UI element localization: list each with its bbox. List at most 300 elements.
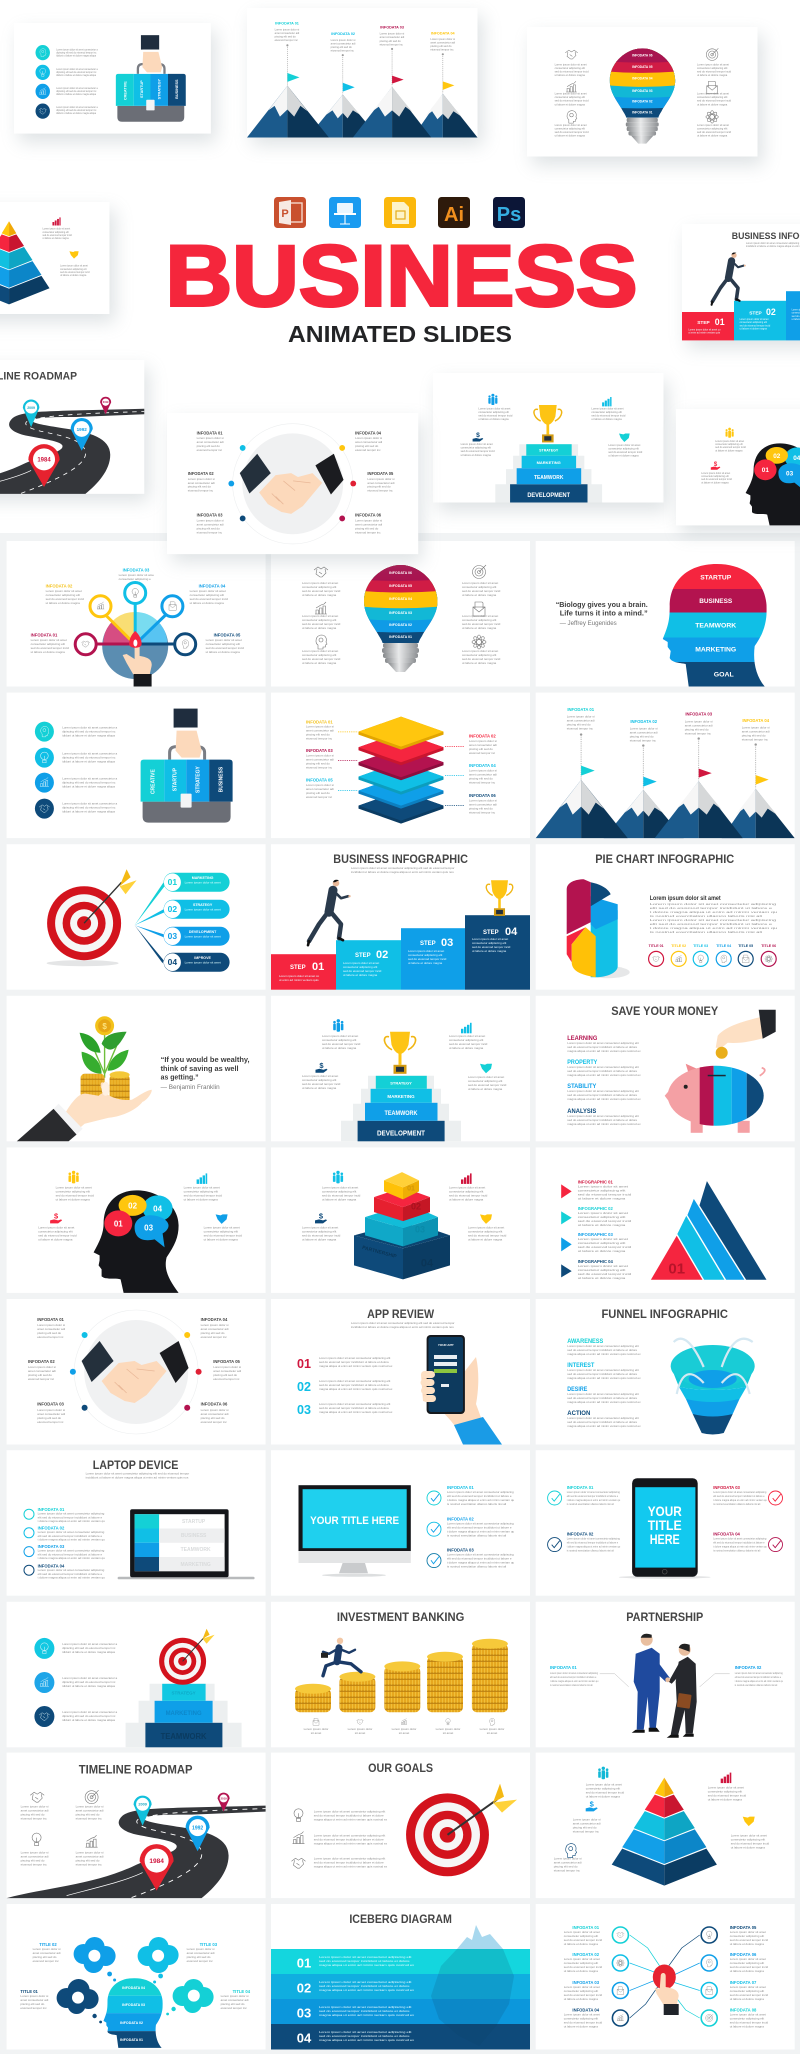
icon: Illustrator: Ai [444, 204, 464, 226]
icon: hand and coin [716, 1010, 776, 1059]
slide: desktop monitor [271, 1450, 530, 1596]
pill labels [189, 876, 217, 960]
step text: Lorem ipsum dolor sit amet co [279, 974, 320, 978]
briefcase body [141, 760, 233, 823]
labels and text: INFODATA 02 [447, 1517, 474, 1522]
tablet title [648, 1503, 682, 1547]
slide: investment banking [271, 1602, 530, 1747]
figure: runner [308, 890, 348, 945]
icon: target [159, 1638, 206, 1685]
labels [567, 707, 770, 724]
labels and text: DESIRE [567, 1386, 587, 1393]
pill numbers: 03 [168, 931, 177, 941]
numbers [297, 1956, 312, 2046]
labels: INFODATA 02 [46, 584, 73, 588]
bottom captions: Lorem ipsum dolor [436, 1727, 460, 1731]
labels and text [550, 1665, 783, 1687]
hero card: handshake [167, 413, 422, 562]
pill labels: DEVELOPMENT [189, 930, 217, 934]
heading: INVESTMENT BANKING [337, 1612, 464, 1624]
figure: runner head [333, 880, 351, 897]
layers illustration [271, 693, 530, 838]
pyramid [612, 1778, 717, 1886]
icon: hand behind phone [421, 1357, 483, 1429]
labels: Lorem ipsum dolor sit ame [119, 573, 154, 577]
subtitle: ANIMATED SLIDES: ANIMATED SLIDES [288, 321, 512, 347]
bottom captions [304, 1727, 504, 1735]
briefcase handle and hand [170, 709, 205, 760]
pin years: 2009 [138, 1803, 147, 1807]
labels: INFODATA 06 [201, 1402, 228, 1406]
vertical labels: STRATEGY [196, 766, 202, 793]
stair labels: DEVELOPMENT [377, 1130, 426, 1137]
step labels [290, 926, 518, 973]
pill numbers: 04 [168, 957, 177, 967]
slide: iceberg diagram [271, 1904, 530, 2050]
labels and text: ACTION [567, 1410, 591, 1417]
bulb band labels: INFODATA 05 [389, 584, 412, 588]
head labels: INFODATA 02 [120, 2021, 143, 2025]
quote: “Biology gives you a brain. [556, 600, 648, 609]
icon: plant stem and leaves [80, 1032, 129, 1078]
slide: laptop device [7, 1450, 266, 1596]
icons in rings [81, 588, 189, 648]
bulb screw base [382, 643, 419, 672]
title: BUSINESS: BUSINESS [166, 228, 638, 324]
head labels [695, 574, 737, 678]
slide: brain head [7, 1147, 266, 1293]
icons [316, 1019, 492, 1073]
slide: tablet [536, 1450, 795, 1596]
heading: PARTNERSHIP [626, 1612, 704, 1624]
slide: wealth quote [7, 996, 266, 1141]
chart: 3D pie cylinder [567, 879, 630, 978]
hero card: timeline [0, 360, 149, 501]
head silhouette [94, 1190, 179, 1293]
head bands [104, 1978, 163, 2048]
right labels: INFODATA 07 [730, 1980, 757, 1985]
slide: hub diagram [536, 1904, 795, 2050]
tablet title: TITLE [648, 1517, 682, 1533]
quote: think of saving as well [161, 1064, 239, 1073]
pill lorem: Lorem ipsum dolor sit amet [185, 935, 221, 939]
head labels: BUSINESS [699, 598, 732, 605]
labels: INFODATA 04 [199, 584, 226, 588]
nodes [612, 1927, 717, 2026]
laptop row labels: BUSINESS [181, 1533, 207, 1539]
head silhouette bands [662, 564, 767, 686]
hero card: business steps [682, 224, 800, 348]
labels: INFODATA 06 [469, 793, 496, 798]
labels and text: AWARENESS [567, 1338, 603, 1345]
slide: app review [271, 1299, 530, 1444]
title labels [649, 944, 776, 948]
cloud: cyan [138, 1937, 179, 1984]
head labels: GOAL [714, 672, 734, 678]
cube labels [361, 1185, 434, 1269]
brain numbers: 03 [144, 1223, 154, 1232]
numbers [297, 1356, 311, 1417]
labels and text: INFODATA 04 [713, 1532, 741, 1537]
text blocks [62, 726, 118, 814]
step labels: STEP [483, 930, 499, 936]
bottom captions: sit amet [311, 1731, 321, 1735]
icon: button and hand [653, 1964, 679, 2015]
slide: trophy stairs [271, 996, 530, 1141]
icon: gold coin: $ [102, 1022, 107, 1031]
quote: — Jeffrey Eugenides [560, 621, 617, 627]
labels and text: INFODATA 03 [38, 1544, 65, 1549]
labels: INFOGRAPHIC 01 [578, 1179, 614, 1184]
laptop row labels: TEAMWORK [181, 1547, 211, 1553]
labels and text [567, 1035, 641, 1126]
left labels: INFODATA 03 [572, 1980, 600, 1985]
laptop row labels [180, 1519, 211, 1568]
icon: shaking hands [102, 1361, 167, 1403]
icon: Keynote [329, 197, 361, 228]
cloud: teal [166, 1979, 214, 2015]
bulb band labels: INFODATA 03 [389, 611, 412, 615]
slide: our goals [271, 1753, 530, 1898]
labels: INFODATA 05 [214, 632, 241, 638]
head labels: MARKETING [695, 646, 736, 654]
circle icons [39, 1643, 50, 1720]
labels and text [567, 1485, 767, 1553]
icon: pointing hand [123, 631, 152, 686]
text blocks [554, 1783, 769, 1873]
labels and text: INFODATA 02 [38, 1526, 65, 1531]
sleeves [82, 1341, 189, 1383]
head labels: TEAMWORK [695, 622, 737, 630]
monitor title: YOUR TITLE HERE [310, 1515, 399, 1527]
icon: laptop [118, 1509, 255, 1579]
pin years: 2019 [220, 1797, 227, 1801]
funnel arrows [674, 1339, 753, 1394]
icon: phone [427, 1335, 465, 1414]
labels: INFOGRAPHIC 03 [578, 1232, 614, 1237]
water bands [271, 1949, 530, 2050]
labels: INFODATA 03 [123, 568, 150, 572]
step labels: 04 [505, 926, 518, 938]
coin stacks [81, 1071, 130, 1106]
subtitle [86, 1472, 189, 1480]
hero card: briefcase [14, 23, 216, 142]
labels and text: INFODATA 03 [447, 1548, 474, 1553]
icon: fingers [420, 1371, 436, 1402]
pin years [138, 1797, 227, 1865]
bottom icons [313, 1718, 495, 1725]
chart: semicircle sectors [102, 612, 168, 679]
stair labels: TEAMWORK [384, 1111, 418, 1117]
icon: sleeve [17, 1104, 83, 1141]
heading: APP REVIEW [367, 1309, 434, 1321]
brain numbers [114, 1201, 163, 1232]
circle icons [39, 726, 50, 812]
slide: triangle [536, 1147, 795, 1293]
icon: trophy [384, 1032, 416, 1074]
slide: cube stack [271, 1147, 530, 1293]
quote: “If you would be wealthy, [161, 1055, 250, 1064]
figure: blue suit man [632, 1634, 670, 1733]
slide: handshake [7, 1299, 266, 1444]
text heading: Lorem ipsum dolor sit amet [650, 896, 721, 902]
gray side stairs [126, 1684, 242, 1747]
figure: dark suit man [665, 1644, 697, 1738]
icon: target [406, 1793, 489, 1876]
slide: thought head [7, 1904, 266, 2050]
step labels: 03 [441, 937, 453, 949]
labels and text: ANALYSIS [567, 1108, 596, 1115]
spokes and rings [75, 582, 196, 655]
arrows [561, 1184, 572, 1277]
head labels: INFODATA 03 [122, 2003, 145, 2007]
icon: Photoshop: Ps [497, 204, 521, 226]
brain lobes [104, 1195, 173, 1247]
vertical labels: STARTUP [173, 767, 179, 791]
tablet title: YOUR [648, 1503, 682, 1519]
labels and text: INFODATA 01 [447, 1485, 474, 1490]
title labels: TITLE 05 [738, 944, 753, 948]
bulb bands [351, 561, 451, 646]
vertical labels: BUSINESS [219, 766, 225, 792]
iceberg underwater [431, 1949, 514, 2046]
bottom captions: Lorem ipsum dolor [304, 1727, 328, 1731]
bottom captions: sit amet [399, 1731, 409, 1735]
labels: INFODATA 01 [567, 707, 595, 712]
step labels: STEP [420, 941, 436, 947]
pin years: 1992 [192, 1826, 203, 1832]
icon: open hand [64, 1082, 152, 1131]
pill lorem: Lorem ipsum dolor sit amet [185, 881, 221, 885]
text blocks [21, 1805, 104, 1867]
right labels: INFODATA 08 [730, 2008, 757, 2012]
labels: INFODATA 02 [28, 1359, 55, 1364]
cloud: navy [57, 1979, 102, 2023]
step labels: 02 [376, 949, 388, 961]
title icon glyphs [652, 955, 773, 963]
bottom captions: sit amet [487, 1731, 497, 1735]
labels: consectetur adipiscing e [119, 577, 151, 581]
head labels: INFODATA 01 [120, 2038, 143, 2042]
stair labels [377, 1080, 426, 1137]
pill lorem [185, 881, 221, 965]
quote: as getting.” [161, 1072, 199, 1081]
right text [730, 1930, 768, 2028]
slide: mountains [536, 693, 795, 838]
heading: PIE CHART INFOGRAPHIC [595, 854, 734, 866]
icon: Google Slides [384, 197, 416, 228]
quote [556, 600, 648, 627]
heading: ICEBERG DIAGRAM [349, 1914, 452, 1926]
step labels: 01 [312, 961, 324, 973]
labels: INFODATA 02 [630, 719, 658, 724]
slide: target with pills [7, 844, 266, 990]
pill labels: STRATEGY [193, 903, 213, 907]
text blocks [319, 1955, 414, 2042]
cube stack illustration [354, 1172, 450, 1279]
pill lorem: Lorem ipsum dolor sit amet [185, 961, 221, 965]
icon: PowerPoint: P [281, 208, 289, 220]
connectors [600, 1674, 730, 1687]
slide: save your money [536, 996, 795, 1141]
icon: dart [84, 869, 137, 923]
mountain range [536, 780, 795, 838]
icon: PowerPoint [274, 197, 306, 228]
nested triangle [650, 1179, 768, 1280]
labels: INFODATA 04 [469, 763, 496, 768]
stair steps [145, 1684, 222, 1747]
title labels: TITLE 06 [761, 944, 776, 948]
slide: briefcase [7, 693, 266, 838]
iceberg tip [457, 1925, 503, 1949]
pill numbers [168, 877, 177, 967]
bullets [24, 1509, 34, 1575]
labels and text: INFODATA 01 [550, 1665, 577, 1670]
stair labels [161, 1690, 207, 1741]
subtitle [351, 866, 455, 874]
numbers: 02 [297, 1379, 311, 1394]
numbers: 01 [297, 1356, 311, 1371]
text blocks [302, 581, 501, 665]
check icons [548, 1491, 782, 1552]
text blocks [302, 1185, 507, 1241]
check icons [427, 1491, 441, 1568]
labels and text: INFODATA 04 [38, 1564, 65, 1569]
target shadow [47, 960, 119, 966]
icon: Photoshop [493, 197, 525, 228]
labels: INFODATA 01 [37, 1317, 65, 1322]
labels and text: LEARNING [567, 1035, 597, 1042]
gray disc [74, 1310, 198, 1434]
cube labels: 03 [415, 1224, 425, 1234]
labels and text: TITLE 02 [39, 1942, 57, 1947]
text blocks [567, 715, 770, 743]
slide: partnership [536, 1602, 795, 1747]
labels: INFODATA 05 [213, 1359, 241, 1364]
labels: INFODATA 04 [742, 718, 770, 723]
figure: running businessman [321, 1638, 361, 1676]
subtitle [351, 1321, 455, 1329]
bulb band labels [389, 571, 412, 639]
cube labels: PARTNERSHIP [361, 1245, 398, 1260]
road [7, 1806, 266, 1898]
heading: LAPTOP DEVICE [93, 1460, 179, 1472]
dotted connectors [338, 732, 464, 806]
left labels: INFODATA 01 [572, 1925, 600, 1930]
title labels: TITLE 02 [671, 944, 686, 948]
labels and text [567, 1338, 641, 1428]
dots [70, 1332, 202, 1411]
tablet title: HERE [650, 1531, 680, 1547]
stair labels: MARKETING [166, 1710, 202, 1717]
vertical labels: CREATIVE [151, 768, 157, 794]
quote [161, 1055, 250, 1091]
heading: FUNNEL INFOGRAPHIC [601, 1309, 728, 1321]
labels [306, 720, 497, 815]
bulb band labels: INFODATA 01 [389, 635, 412, 639]
labels and text: INFODATA 01 [567, 1485, 594, 1490]
icon: tablet [619, 1478, 711, 1579]
quote: — Benjamin Franklin [161, 1085, 220, 1091]
brain numbers: 04 [153, 1204, 163, 1213]
slide: pie chart infographic [536, 844, 795, 990]
funnel cone [671, 1345, 755, 1434]
labels [31, 568, 244, 654]
cube labels: 01 [407, 1185, 415, 1192]
text blocks [319, 1356, 393, 1414]
slide: target on stairs [7, 1602, 266, 1747]
labels: INFODATA 03 [306, 748, 333, 753]
icon: phone: YOUR APP [438, 1343, 453, 1347]
labels and text: PROPERTY [567, 1059, 598, 1066]
brain numbers: 02 [128, 1201, 138, 1210]
text blocks [28, 1323, 241, 1424]
labels: INFOGRAPHIC 02 [578, 1206, 614, 1211]
labels and text: INTEREST [567, 1362, 594, 1369]
labels and text: TITLE 01 [20, 1989, 39, 1994]
icons [30, 1790, 99, 1847]
labels: INFODATA 05 [306, 778, 333, 783]
numbers: 03 [297, 2006, 311, 2020]
slide: business infographic steps [271, 844, 530, 990]
laptop row labels: STARTUP [182, 1519, 206, 1525]
heading: OUR GOALS [368, 1763, 433, 1775]
laptop row labels: MARKETING [180, 1562, 211, 1568]
heading: BUSINESS INFOGRAPHIC [333, 854, 468, 866]
title labels: TITLE 03 [693, 944, 708, 948]
icon: piggy bank [665, 1064, 765, 1133]
labels and text: TITLE 04 [233, 1989, 251, 1994]
text blocks [302, 1034, 507, 1091]
text blocks [314, 1810, 388, 1869]
pill lorem: Lorem ipsum dolor sit amet [185, 908, 221, 912]
labels and text: STABILITY [567, 1083, 597, 1090]
bottom captions: sit amet [355, 1731, 365, 1735]
heading: TIMELINE ROADMAP [79, 1765, 193, 1777]
icons [292, 1809, 306, 1868]
right labels: INFODATA 05 [730, 1925, 757, 1930]
text blocks [38, 1185, 242, 1241]
hero card: light bulb [527, 27, 763, 165]
head labels: STARTUP [700, 574, 731, 582]
slide: radial hand infographic [7, 541, 266, 686]
labels: INFODATA 04 [201, 1317, 228, 1322]
slide grid background [0, 533, 800, 2054]
icon circles [35, 722, 54, 819]
hero card: trophy stairs [433, 373, 668, 511]
right labels [730, 1925, 757, 2012]
numbers: 02 [297, 1980, 311, 1996]
labels: INFODATA 03 [685, 712, 713, 717]
icons [315, 1171, 492, 1224]
heading: SAVE YOUR MONEY [611, 1006, 719, 1018]
slide: head quote [536, 541, 795, 687]
slide: light bulb infographic [271, 541, 530, 686]
numbers: 03 [297, 1402, 311, 1417]
icon circles [34, 1638, 54, 1727]
step blocks [271, 915, 530, 990]
right labels: INFODATA 06 [730, 1952, 757, 1957]
step text [279, 937, 511, 982]
left labels: INFODATA 02 [572, 1952, 600, 1957]
coin stacks [295, 1639, 508, 1712]
cube labels: 04 [421, 1257, 434, 1269]
bulb band labels: INFODATA 04 [389, 597, 412, 601]
title icons [649, 951, 776, 966]
labels: INFOGRAPHIC 04 [578, 1259, 614, 1264]
stair steps [358, 1076, 445, 1141]
left labels [572, 1925, 600, 2012]
